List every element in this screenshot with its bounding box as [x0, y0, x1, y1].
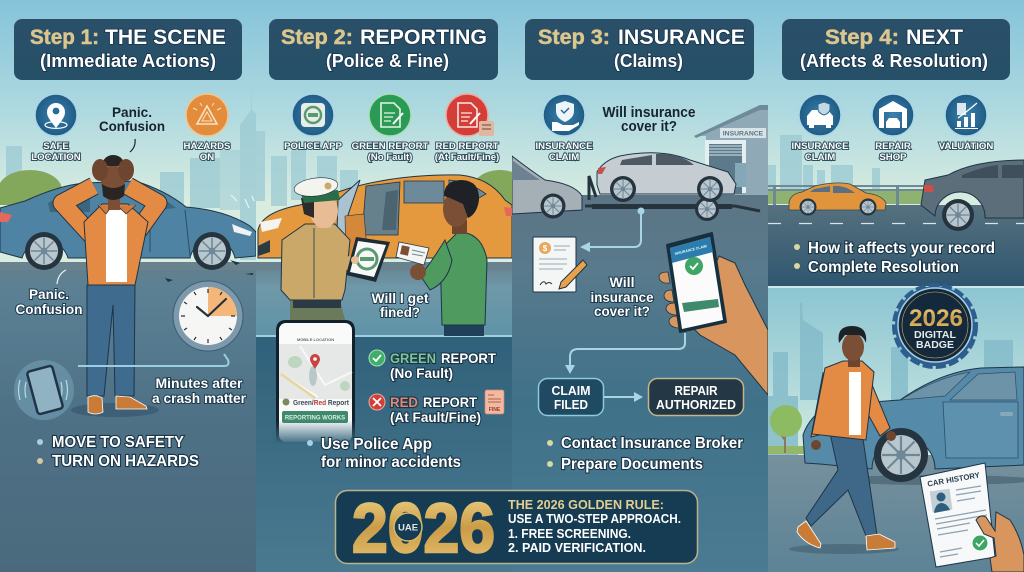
icon: red report: (At Fault/Fine) — [435, 152, 499, 163]
heading: step 3: Step 3: — [538, 25, 610, 49]
illustration: man walking away — [789, 326, 899, 554]
illustration: man with hands on head — [62, 155, 159, 417]
text: will insurance cover it, lower — [590, 274, 654, 319]
panel: step 1 the scene — [0, 0, 256, 468]
icon: safe location: SAFE — [43, 141, 69, 152]
illustration: police app phone: Green/Red Report — [293, 400, 350, 407]
illustration: blue car by the road — [803, 367, 1024, 485]
icon: hazards on — [184, 94, 231, 163]
badge: 2026 digital badge: 2026 — [909, 305, 963, 332]
heading: step 3: (Claims) — [614, 50, 683, 71]
panel: step 4 next — [768, 0, 1024, 572]
bullet list: step 3: Contact Insurance Broker — [561, 435, 743, 452]
legend: green report: REPORT — [441, 350, 496, 366]
text: will insurance cover it, lower: cover it? — [594, 303, 650, 319]
callout: 2026 golden rule: 2. PAID VERIFICATION. — [508, 540, 646, 555]
legend: green report: (No Fault) — [390, 365, 453, 381]
text: minutes after a crash: Minutes after — [156, 375, 243, 391]
illustration: driver with ID card — [396, 180, 487, 336]
heading: step 4 — [782, 19, 1010, 80]
text: minutes after a crash: a crash matter — [152, 390, 247, 406]
icon: tree — [770, 405, 802, 453]
heading: step 3 — [525, 19, 754, 80]
bullet list: step 1 — [37, 434, 199, 470]
box: claim filed: FILED — [554, 397, 588, 412]
icon: green report: GREEN REPORT — [352, 141, 429, 152]
heading: step 2: (Police & Fine) — [326, 50, 449, 71]
bullet list: step 2: for minor accidents — [321, 454, 461, 471]
heading: step 2: REPORTING — [360, 25, 487, 49]
heading: step 4: Step 4: — [825, 25, 899, 49]
callout: panic confusion, top: Confusion — [99, 118, 165, 134]
road dashes — [768, 222, 1024, 224]
callout: 2026 golden rule: 1. FREE SCREENING. — [508, 526, 631, 541]
heading: step 4: NEXT — [906, 25, 963, 49]
icon: signed document and pencil — [533, 237, 587, 292]
text: will I get fined — [370, 292, 430, 318]
illustration: hand holding phone with claim — [659, 233, 768, 395]
bullet list: step 2 — [307, 436, 461, 471]
legend: green report — [369, 350, 496, 381]
heading: step 2: Step 2: — [281, 25, 353, 49]
box: repair authorized — [648, 378, 744, 416]
heading: step 1: THE SCENE — [105, 25, 226, 49]
document: car history with hand — [920, 463, 1024, 572]
icon: red report: RED REPORT — [436, 141, 499, 152]
legend: red report — [369, 390, 504, 425]
text: will I get fined: fined? — [380, 304, 420, 320]
box: repair authorized: AUTHORIZED — [656, 397, 736, 412]
text: will insurance cover it, top: cover it? — [621, 118, 677, 135]
icon: green report — [352, 94, 429, 163]
icon: vibrating phone — [14, 360, 74, 420]
callout: panic confusion, lower — [16, 270, 82, 317]
icon: repair shop — [872, 94, 914, 163]
legend: green report: GREEN — [390, 350, 436, 366]
panel: step 3 insurance — [512, 0, 768, 572]
illustration: police app phone — [276, 320, 355, 442]
illustration: crashed blue car — [0, 181, 256, 282]
icon: insurance claim: CLAIM — [549, 152, 579, 163]
bullet list: step 2: Use Police App — [321, 436, 432, 453]
text: will insurance cover it, lower: insurance — [590, 289, 654, 305]
arrow: phone to claim filed — [565, 333, 685, 374]
icon: hazards on: HAZARDS — [184, 141, 231, 152]
illustration: police officer with tablet — [281, 175, 390, 320]
text: will insurance cover it, lower: Will — [610, 274, 634, 290]
icon: red report — [435, 94, 499, 163]
bullet list: step 3 — [547, 435, 743, 473]
heading: step 1: Step 1: — [30, 25, 99, 49]
document: car history with hand: CAR HISTORY — [927, 470, 981, 489]
icon: green report: (No Fault) — [368, 152, 412, 163]
icon: insurance claim car: INSURANCE — [791, 141, 849, 152]
text: will insurance cover it, top: Will insurance — [602, 104, 696, 121]
heading: step 3: INSURANCE — [618, 25, 745, 49]
heading: step 1 — [14, 19, 242, 80]
callout: panic confusion, lower: Panic. — [29, 286, 69, 302]
illustration: grey car — [921, 160, 1024, 231]
text: will I get fined: Will I get — [372, 290, 429, 306]
legend: red report: (At Fault/Fine) — [390, 409, 481, 425]
callout: 2026 golden rule — [336, 489, 698, 567]
icon: valuation chart — [939, 94, 993, 152]
callout: panic confusion, top — [99, 104, 165, 152]
callout: 2026 golden rule: 2026 — [352, 489, 495, 567]
callout: 2026 golden rule: USE A TWO-STEP APPROACH. — [508, 511, 681, 526]
text: minutes after a crash — [152, 377, 247, 404]
callout: 2026 golden rule: THE 2026 GOLDEN RULE: — [508, 497, 664, 512]
icon: insurance claim — [535, 94, 593, 163]
icon: safe location: LOCATION — [31, 152, 81, 163]
bullet list: step 1: TURN ON HAZARDS — [52, 453, 199, 470]
callout: panic confusion, lower: Confusion — [16, 301, 82, 317]
illustration: insurance garage — [694, 105, 768, 195]
legend: red report: RED — [390, 394, 418, 410]
bullet list: step 4: How it affects your record — [808, 240, 995, 257]
icon: valuation chart: VALUATION — [939, 141, 993, 152]
box: repair authorized: REPAIR — [674, 383, 718, 398]
legend: red report: REPORT — [423, 394, 477, 410]
icon: repair shop: REPAIR — [875, 141, 911, 152]
icon: signed document and pencil: $ — [543, 244, 548, 253]
icon: repair shop: SHOP — [879, 152, 907, 163]
badge: 2026 digital badge: BADGE — [916, 339, 954, 351]
arrow: claim to repair — [604, 392, 643, 402]
icon: insurance claim: INSURANCE — [535, 141, 593, 152]
icon: clock — [173, 281, 243, 351]
icon: safe location — [31, 94, 81, 163]
text: will insurance cover it, top — [602, 106, 695, 131]
bullet list: step 4: Complete Resolution — [808, 259, 959, 276]
heading: step 2 — [269, 19, 498, 80]
icon: police app — [284, 94, 342, 152]
illustration: orange car on road — [789, 183, 886, 216]
callout: 2026 golden rule: UAE — [398, 522, 418, 534]
heading: step 4: (Affects & Resolution) — [800, 50, 988, 71]
badge: 2026 digital badge: DIGITAL — [914, 329, 957, 341]
bullet list: step 3: Prepare Documents — [561, 456, 703, 473]
callout: panic confusion, top: Panic. — [112, 104, 152, 120]
legend: red report: FINE — [489, 407, 501, 413]
heading: step 1: (Immediate Actions) — [40, 50, 216, 71]
panel: step 2 reporting — [256, 0, 528, 572]
bullet list: step 4 — [794, 240, 995, 276]
icon: insurance claim car — [791, 94, 849, 163]
arrow: tow truck to document — [580, 208, 644, 252]
box: claim filed — [538, 378, 604, 416]
connector line: clock to phone — [78, 354, 228, 366]
icon: insurance claim car: CLAIM — [805, 152, 835, 163]
illustration: orange car with open door — [258, 175, 512, 262]
illustration: hand holding phone with claim: INSURANCE CLAIM — [674, 244, 707, 256]
badge: 2026 digital badge — [895, 286, 975, 366]
illustration: tow truck with SUV — [512, 153, 760, 221]
bullet list: step 1: MOVE TO SAFETY — [52, 434, 185, 451]
icon: hazards on: ON — [200, 152, 214, 163]
icon: police app: POLICE APP — [284, 141, 342, 152]
box: claim filed: CLAIM — [552, 383, 590, 398]
illustration: police app phone: REPORTING WORKS — [285, 416, 345, 422]
illustration: insurance garage: INSURANCE — [723, 130, 764, 138]
illustration: police app phone: MOBILE LOCATION — [297, 337, 334, 342]
